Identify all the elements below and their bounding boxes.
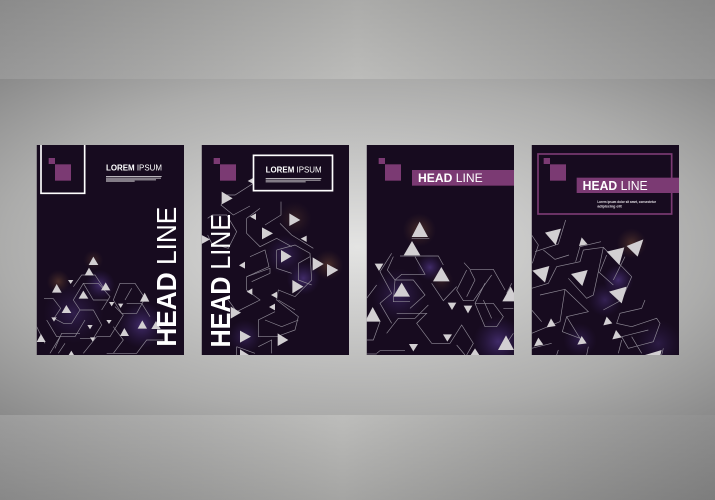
body text: adipiscing elit xyxy=(597,204,622,208)
logo squares xyxy=(379,158,401,181)
logo squares xyxy=(544,158,566,181)
hexagon line network xyxy=(208,183,313,355)
hexagon line network xyxy=(367,238,513,355)
triangles xyxy=(37,257,161,355)
panel: poster 1 xyxy=(37,145,184,355)
heading: LOREM IPSUM xyxy=(106,163,162,173)
body text: Lorem ipsum dolor sit amet, consectetur xyxy=(597,200,656,204)
glows xyxy=(50,253,161,344)
panel: poster 3 xyxy=(366,145,514,355)
glows xyxy=(228,202,343,353)
triangles xyxy=(532,229,662,357)
glows xyxy=(568,232,674,355)
headline bar xyxy=(577,178,679,193)
glows xyxy=(378,217,514,355)
vertical headline: HEAD LINE xyxy=(151,207,182,347)
headline bar xyxy=(412,170,514,186)
white text box xyxy=(253,155,332,191)
purple frame xyxy=(538,154,672,214)
logo squares xyxy=(49,158,71,181)
heading: LOREM IPSUM xyxy=(266,164,322,174)
triangles xyxy=(365,222,518,355)
logo squares xyxy=(214,158,236,181)
white frame xyxy=(41,145,85,193)
headline bar: HEAD LINE xyxy=(418,171,483,185)
vertical headline: HEAD LINE xyxy=(205,214,236,347)
body text xyxy=(106,176,162,182)
panel: poster 4 xyxy=(532,145,682,367)
headline bar: HEAD LINE xyxy=(583,179,648,193)
hexagon line network xyxy=(37,275,163,353)
body text xyxy=(266,178,321,182)
triangles xyxy=(202,178,338,355)
panel: poster 2 xyxy=(202,145,349,355)
hexagon line network xyxy=(532,220,663,355)
